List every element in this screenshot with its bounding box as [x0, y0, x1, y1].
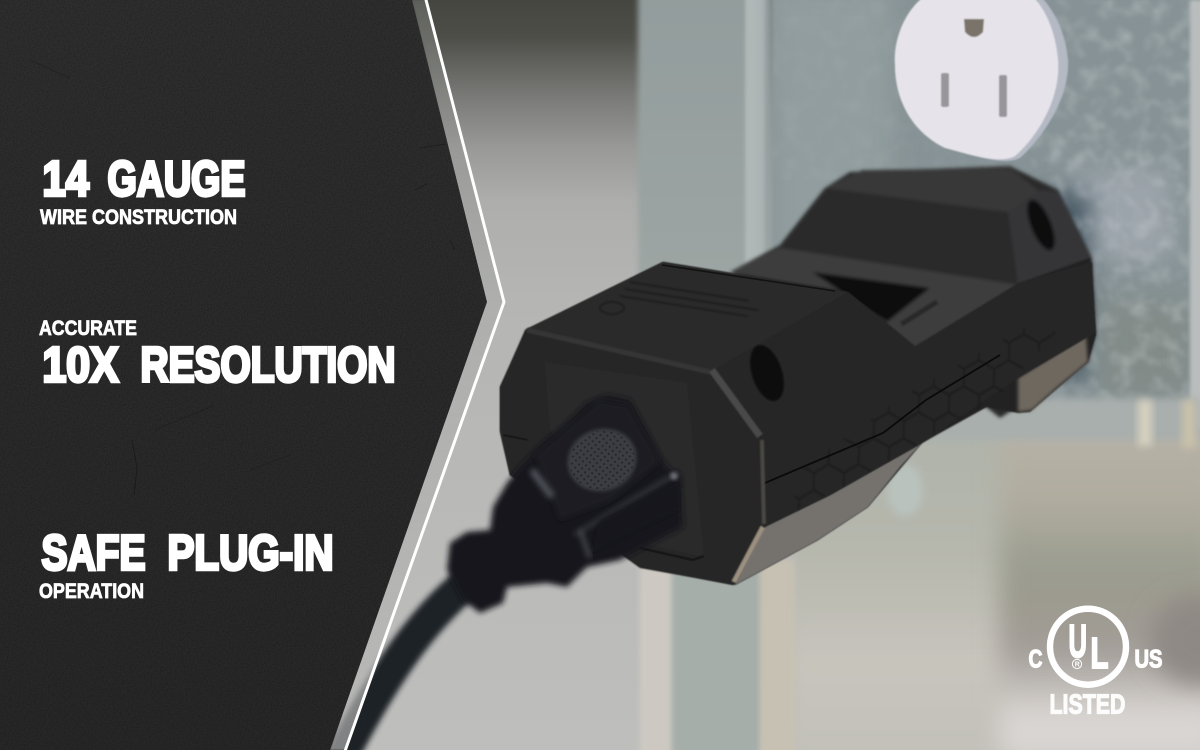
icon: UL listed certification mark: [1028, 609, 1162, 720]
icon: UL listed certification mark: L: [1090, 629, 1108, 678]
photo: galvanized metal outlet box: [772, 0, 1200, 448]
text block: 14 gauge: [40, 152, 246, 229]
panel: dark textured chevron: [0, 0, 504, 750]
photo: main adapter body with hexagon grip: [500, 258, 1096, 585]
arrow: white chevron outline: [344, 0, 504, 750]
photo: black power cord: [335, 565, 490, 750]
text block: 10x resolution: RESOLUTION: [140, 338, 396, 392]
text block: 14 gauge: GAUGE: [108, 152, 246, 206]
text block: safe plug-in: PLUG-IN: [168, 526, 334, 580]
text block: 10x resolution: [39, 316, 396, 392]
text block: 10x resolution: ACCURATE: [39, 316, 137, 340]
photo: white wall outlet: [895, 0, 1068, 161]
text block: safe plug-in: [39, 526, 334, 603]
photo: molded cord plug: [447, 395, 683, 613]
text block: safe plug-in: OPERATION: [39, 579, 144, 603]
photo: adapter front face: [500, 330, 764, 585]
photo: rear adapter housing: [730, 166, 1096, 418]
icon: UL listed certification mark: U: [1068, 615, 1087, 667]
icon: UL listed certification mark: US: [1134, 646, 1162, 674]
icon: UL listed certification mark: R: [1075, 662, 1080, 669]
icon: UL listed certification mark: LISTED: [1050, 688, 1126, 720]
text block: 14 gauge: 14: [42, 152, 89, 206]
text block: 14 gauge: WIRE CONSTRUCTION: [40, 205, 237, 229]
text block: safe plug-in: SAFE: [42, 526, 146, 580]
icon: UL listed certification mark: C: [1028, 646, 1042, 674]
text block: 10x resolution: 10X: [42, 338, 119, 392]
